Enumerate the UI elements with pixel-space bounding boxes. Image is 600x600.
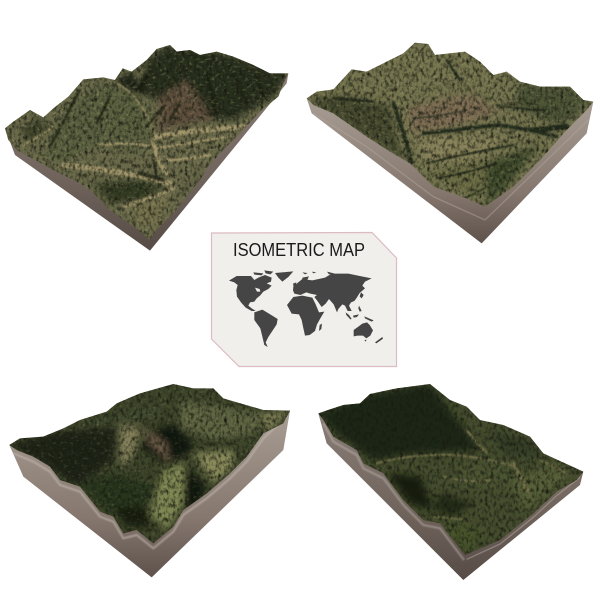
Madagascar	[319, 324, 322, 331]
North America	[229, 275, 272, 311]
map card	[212, 232, 396, 366]
terrain block: bottom right	[318, 384, 584, 580]
Greenland and Arctic	[275, 271, 293, 282]
Australia	[354, 322, 373, 338]
Eurasia	[293, 274, 372, 312]
world map	[229, 270, 383, 347]
card background	[212, 232, 396, 366]
terrain block: top left	[5, 45, 288, 251]
terrain block: bottom left	[9, 384, 290, 578]
Africa	[287, 296, 324, 336]
South America	[254, 310, 278, 347]
title: ISOMETRIC MAP	[233, 240, 365, 260]
Islands	[364, 340, 366, 342]
terrain block: top right	[306, 42, 594, 244]
